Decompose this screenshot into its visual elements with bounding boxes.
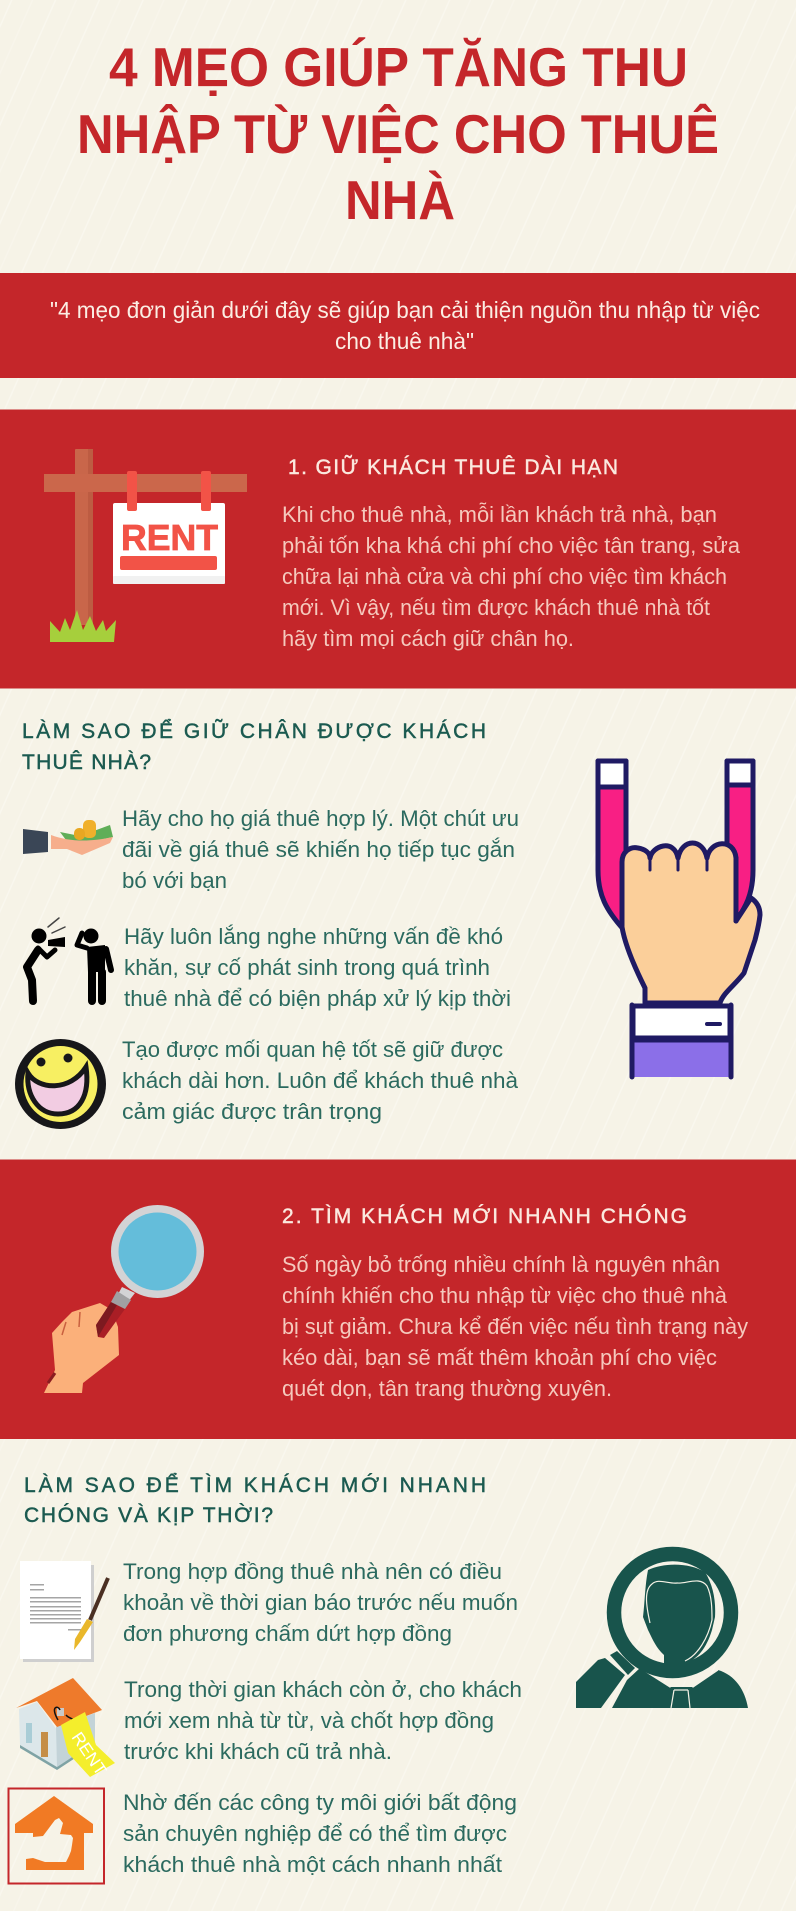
- icon: orange house with thumbs up: [8, 1788, 104, 1884]
- text: show to new tenants: mới xem nhà từ từ, và chốt hợp đồng: [124, 1708, 494, 1733]
- text: tip 1 body: chữa lại nhà cửa và chi phí cho việc tìm khách: [282, 564, 727, 589]
- intro quote text: cho thuê nhà": [335, 328, 474, 354]
- icon: contract and pen: [20, 1561, 108, 1662]
- text: good relationship: Tạo được mối quan hệ tốt sẽ giữ được: [122, 1037, 503, 1062]
- heading: how to find tenants fast: LÀM SAO ĐỂ TÌM KHÁCH MỚI NHANH: [24, 1474, 486, 1497]
- heading: how to find tenants fast: CHÓNG VÀ KỊP THỜI?: [24, 1504, 273, 1527]
- text: fair rent: bó với bạn: [122, 868, 227, 893]
- icon: hand holding magnet: [598, 761, 760, 1077]
- text: tip 2 body: chính khiến cho thu nhập từ việc cho thuê nhà: [282, 1283, 728, 1308]
- text: notice clause: khoản về thời gian báo trước nếu muốn: [123, 1590, 518, 1615]
- text: good relationship: khách dài hơn. Luôn để khách thuê nhà: [122, 1068, 519, 1093]
- icon: hand holding magnifier: [44, 1205, 204, 1393]
- text: notice clause: đơn phương chấm dứt hợp đồng: [123, 1621, 452, 1646]
- text: tip 1 body: mới. Vì vậy, nếu tìm được khách thuê nhà tốt: [282, 595, 710, 620]
- text: show to new tenants: trước khi khách cũ trả nhà.: [124, 1739, 392, 1764]
- panel: intro quote band: [0, 273, 796, 378]
- text: show to new tenants: Trong thời gian khách còn ở, cho khách: [124, 1677, 522, 1702]
- text: fair rent: đãi về giá thuê sẽ khiến họ tiếp tục gắn: [122, 837, 515, 862]
- icon: rent sign: [44, 449, 247, 642]
- icon: two people with megaphone: [27, 918, 111, 1001]
- text: tip 2 body: quét dọn, tân trang thường xuyên.: [282, 1376, 612, 1401]
- text: good relationship: cảm giác được trân trọng: [122, 1099, 382, 1124]
- title: NHÀ: [345, 169, 455, 231]
- heading: how to keep tenants: [22, 719, 486, 774]
- panel: tip 2: [0, 1159, 796, 1439]
- icon: smiley face: [15, 1039, 106, 1129]
- text: tip 1 body: Khi cho thuê nhà, mỗi lần khách trả nhà, bạn: [282, 502, 717, 527]
- text: tip 2 body: kéo dài, bạn sẽ mất thêm khoản phí cho việc: [282, 1345, 717, 1370]
- text: tip 1 body: hãy tìm mọi cách giữ chân họ.: [282, 626, 574, 651]
- text: use brokers: khách thuê nhà một cách nhanh nhất: [123, 1852, 502, 1877]
- text: fair rent: [122, 806, 519, 893]
- text: tip 2 body: bị sụt giảm. Chưa kể đến việc nếu tình trạng này: [282, 1314, 748, 1339]
- text: listen to problems: khăn, sự cố phát sinh trong quá trình: [124, 955, 490, 980]
- text: use brokers: sản chuyên nghiệp để có thể tìm được: [123, 1821, 507, 1846]
- text: use brokers: [123, 1790, 517, 1877]
- icon: person in magnifier: [576, 1554, 748, 1708]
- text: show to new tenants: [124, 1677, 522, 1764]
- text: listen to problems: thuê nhà để có biện pháp xử lý kịp thời: [124, 986, 511, 1011]
- text: tip 2 body: Số ngày bỏ trống nhiều chính là nguyên nhân: [282, 1252, 720, 1277]
- title: 4 MẸO GIÚP TĂNG THU: [109, 36, 688, 98]
- text: notice clause: Trong hợp đồng thuê nhà nên có điều: [123, 1559, 502, 1584]
- icon: rent sign: RENT: [121, 517, 218, 558]
- text: listen to problems: [124, 924, 511, 1011]
- title: NHẬP TỪ VIỆC CHO THUÊ: [77, 103, 719, 165]
- panel: how to find tenants fast: [8, 1474, 748, 1884]
- panel: tip 1: [0, 409, 796, 689]
- heading: how to keep tenants: THUÊ NHÀ?: [22, 751, 151, 774]
- text: fair rent: Hãy cho họ giá thuê hợp lý. Một chút ưu: [122, 806, 519, 831]
- text: tip 1 body: [282, 502, 741, 651]
- title: [77, 36, 719, 231]
- heading: tip 1: 1. GIỮ KHÁCH THUÊ DÀI HẠN: [288, 455, 618, 479]
- text: listen to problems: Hãy luôn lắng nghe những vấn đề khó: [124, 924, 503, 949]
- intro quote text: [50, 297, 760, 354]
- heading: tip 2: 2. TÌM KHÁCH MỚI NHANH CHÓNG: [282, 1205, 687, 1228]
- text: good relationship: [122, 1037, 519, 1124]
- text: tip 1 body: phải tốn kha khá chi phí cho việc tân trang, sửa: [282, 533, 741, 558]
- intro quote text: "4 mẹo đơn giản dưới đây sẽ giúp bạn cải thiện nguồn thu nhập từ việc: [50, 297, 760, 323]
- text: notice clause: [123, 1559, 518, 1646]
- icon: house with rent tag: RENT: [68, 1729, 110, 1779]
- icon: hand with money: [23, 820, 113, 855]
- text: use brokers: Nhờ đến các công ty môi giới bất động: [123, 1790, 517, 1815]
- heading: how to find tenants fast: [24, 1474, 486, 1527]
- heading: how to keep tenants: LÀM SAO ĐỂ GIỮ CHÂN ĐƯỢC KHÁCH: [22, 719, 486, 743]
- panel: how to keep tenants: [15, 719, 760, 1129]
- icon: house with rent tag: [16, 1678, 115, 1779]
- text: tip 2 body: [282, 1252, 748, 1401]
